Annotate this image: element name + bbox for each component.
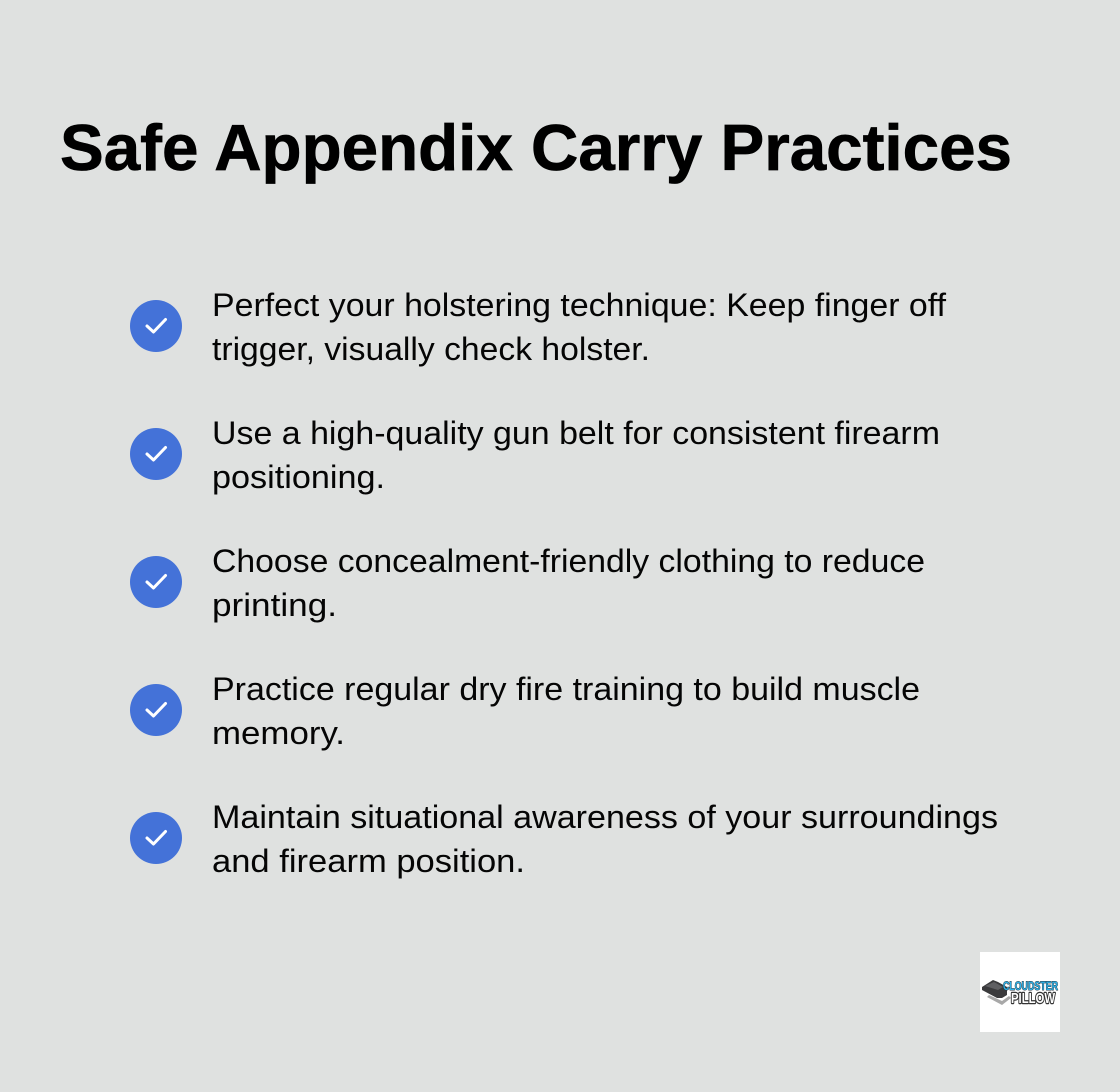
item 2 text <box>212 415 940 495</box>
icon: check circle 2 <box>130 428 182 480</box>
item 5 text <box>212 799 998 879</box>
icon: check circle 1 <box>130 300 182 352</box>
checklist item 4 <box>130 671 920 751</box>
icon: check circle 4 <box>130 684 182 736</box>
item 2 text: Use a high-quality gun belt for consistent firearm <box>212 415 940 451</box>
item 5 text: and firearm position. <box>212 843 525 879</box>
item 3 text: Choose concealment-friendly clothing to reduce <box>212 543 925 579</box>
checklist item 2 <box>130 415 940 495</box>
item 1 text: Perfect your holstering technique: Keep finger off <box>212 287 947 323</box>
icon: check circle 5 <box>130 812 182 864</box>
checklist item 5 <box>130 799 998 879</box>
logo wordmark: CLOUDSTER <box>1003 981 1059 993</box>
item 1 text: trigger, visually check holster. <box>212 331 650 367</box>
item 4 text <box>212 671 920 751</box>
icon: check circle 3 <box>130 556 182 608</box>
logo wordmark <box>1003 981 1059 1007</box>
item 3 text <box>212 543 925 623</box>
icon: pillow <box>982 980 1011 1005</box>
title: Safe Appendix Carry Practices <box>60 111 1012 184</box>
item 4 text: memory. <box>212 715 345 751</box>
item 4 text: Practice regular dry fire training to build muscle <box>212 671 920 707</box>
checklist item 1 <box>130 287 947 367</box>
logo: Cloudster Pillow <box>980 952 1060 1032</box>
item 3 text: printing. <box>212 587 337 623</box>
item 1 text <box>212 287 947 367</box>
logo wordmark: PILLOW <box>1011 990 1056 1007</box>
checklist item 3 <box>130 543 925 623</box>
item 2 text: positioning. <box>212 459 385 495</box>
item 5 text: Maintain situational awareness of your surroundings <box>212 799 998 835</box>
